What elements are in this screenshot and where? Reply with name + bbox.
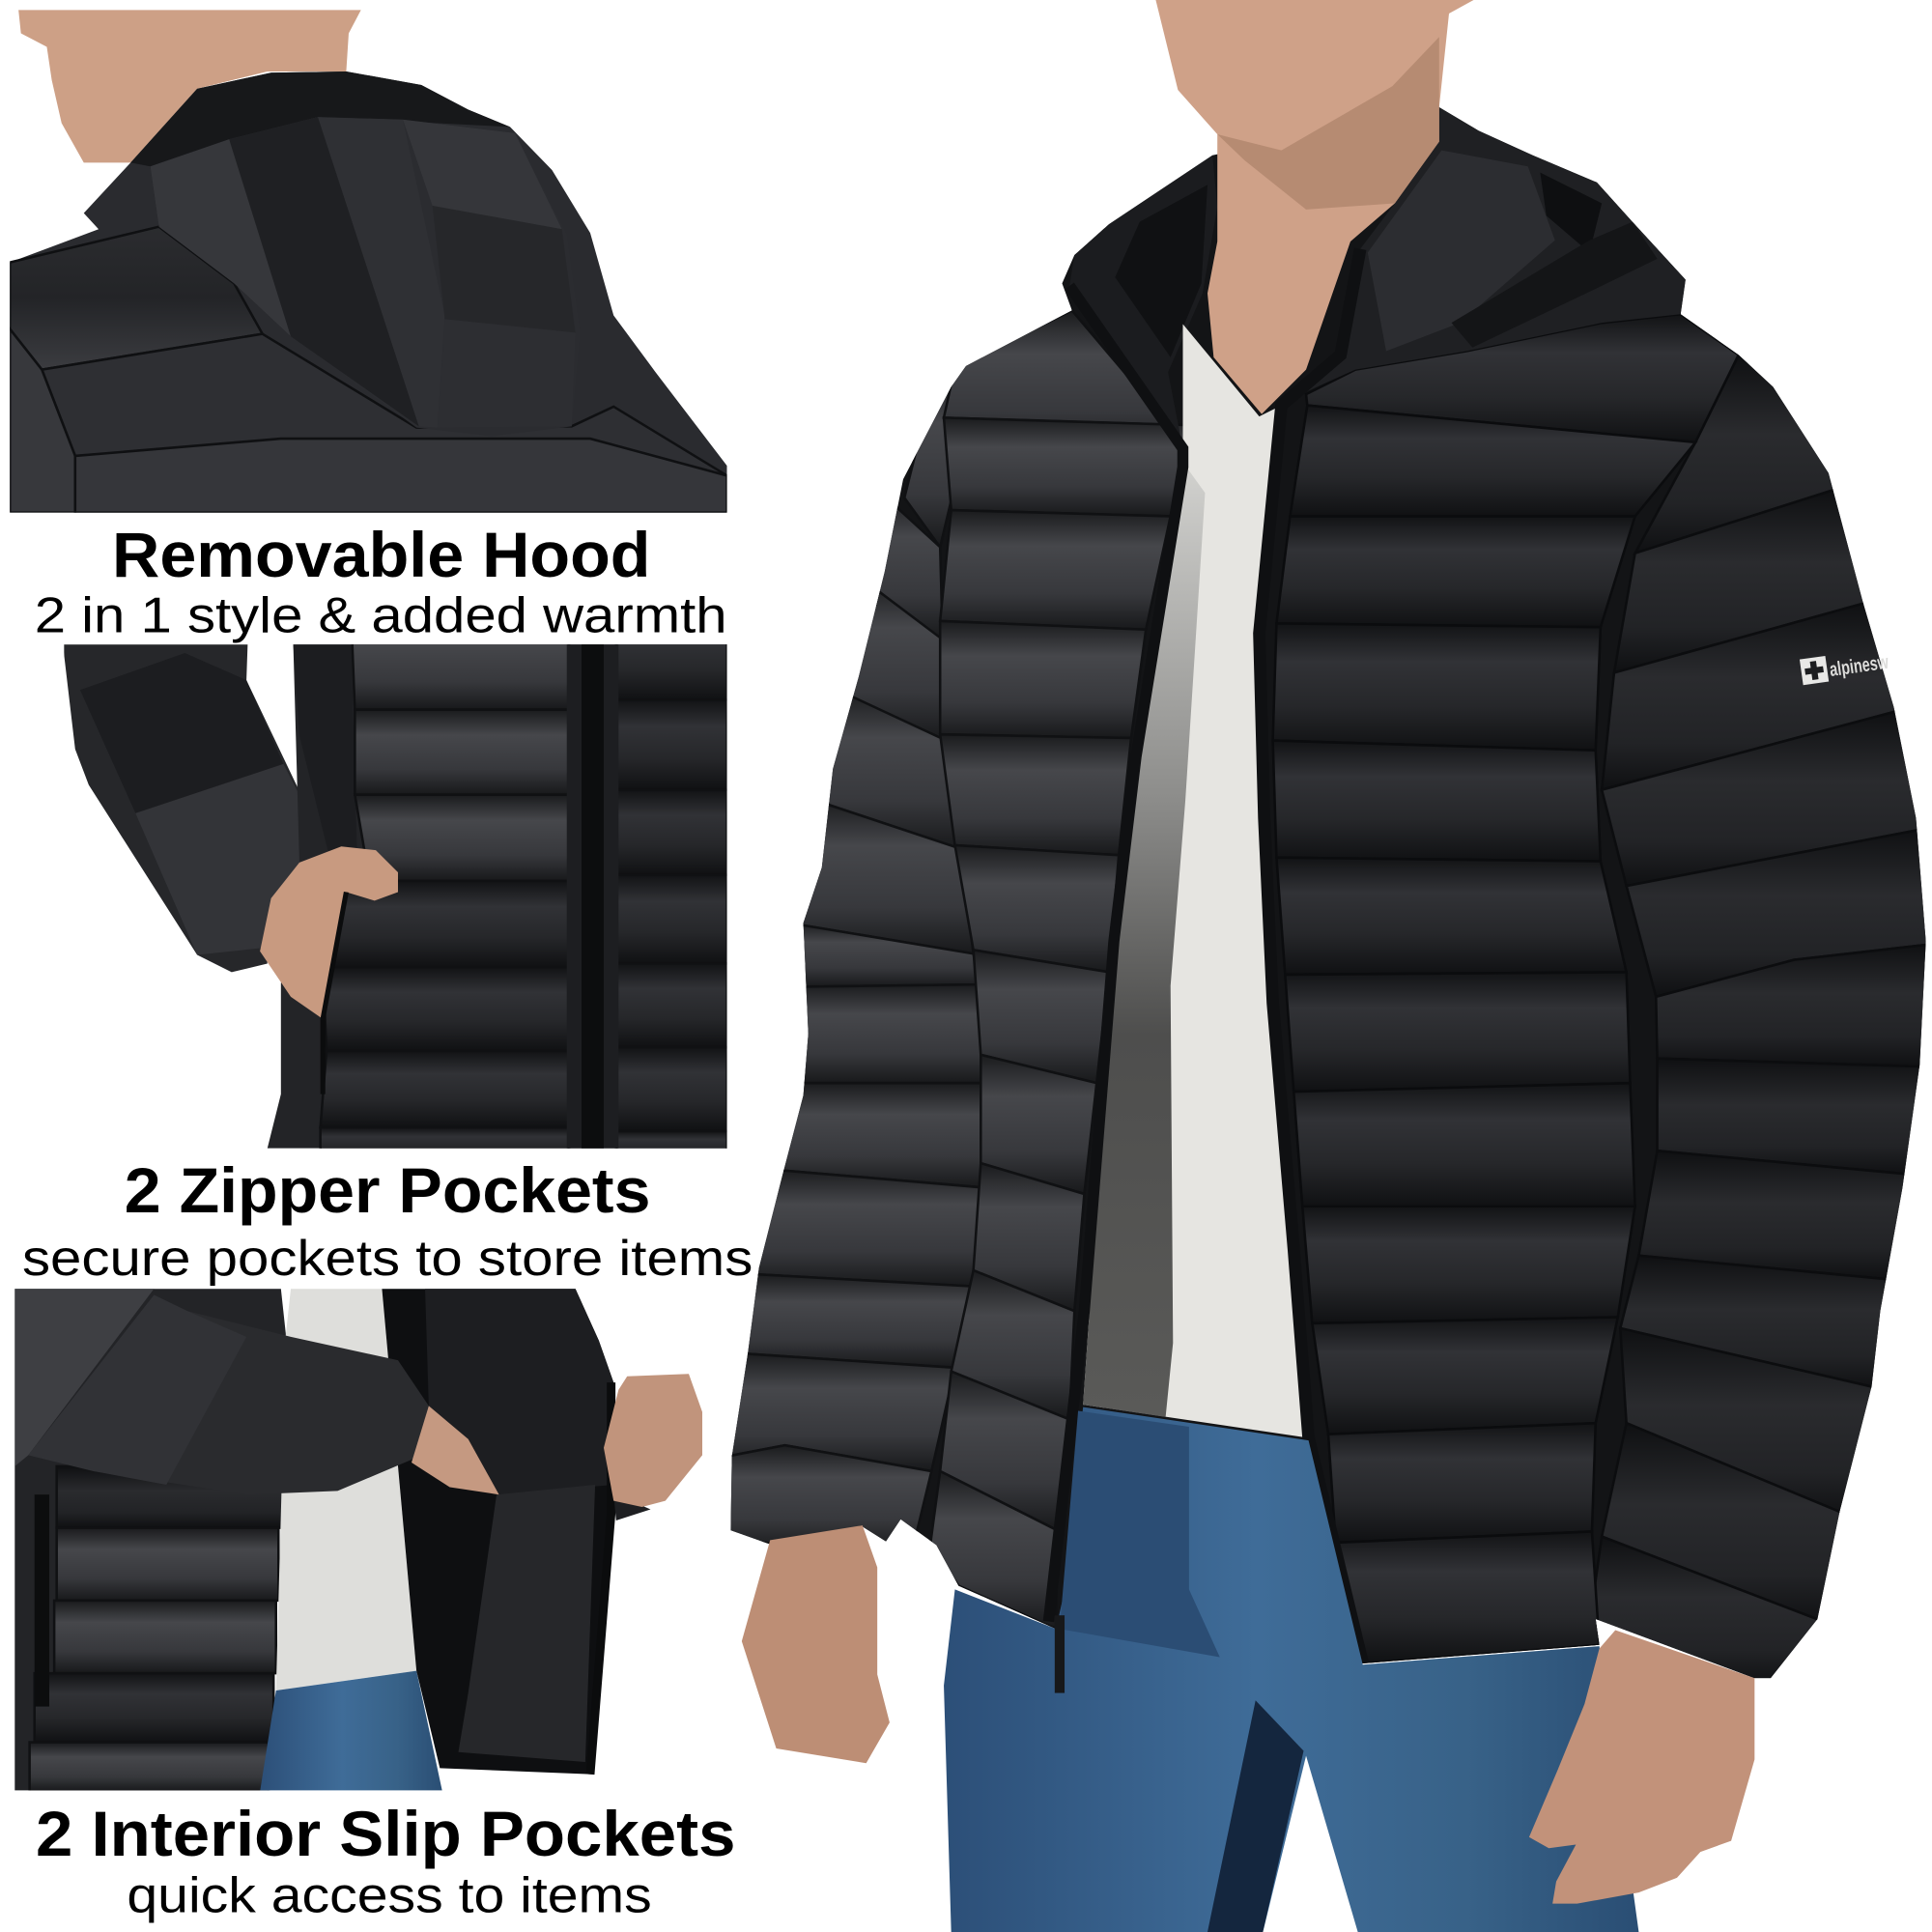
t-shirt xyxy=(276,1289,416,1690)
jacket front xyxy=(268,644,727,1149)
gap between legs xyxy=(1263,1756,1358,1932)
heading: interior slip pockets: 2 Interior Slip Pockets xyxy=(36,1799,735,1870)
heading: removable hood: Removable Hood xyxy=(112,520,650,591)
hood interior shadow xyxy=(1540,173,1602,252)
pocket lining xyxy=(458,1485,595,1762)
upper highlight xyxy=(14,1289,154,1466)
front quilting xyxy=(321,616,727,1158)
subheading: 2 in 1 style & added warmth xyxy=(35,587,727,643)
hood inner panel xyxy=(1368,151,1555,352)
neck and chin xyxy=(1155,0,1474,414)
jacket back xyxy=(10,71,727,513)
chin shadow xyxy=(1217,37,1439,210)
heading: removable hood xyxy=(35,520,727,643)
panel: main jacket photo xyxy=(715,0,1932,1932)
hood xyxy=(1306,107,1686,392)
left zipper xyxy=(1048,286,1182,1622)
right sleeve xyxy=(613,1493,650,1520)
zipper teeth xyxy=(582,644,604,1150)
heading: zipper pockets xyxy=(22,1155,753,1287)
sleeve shading xyxy=(80,653,283,813)
left jacket front xyxy=(14,1289,286,1792)
jeans xyxy=(944,1407,1638,1932)
right hand xyxy=(1529,1631,1754,1904)
subheading: secure pockets to store items xyxy=(22,1231,753,1287)
t-shirt xyxy=(1083,324,1309,1438)
hand in pocket xyxy=(412,1406,499,1494)
panel: zipper pockets photo xyxy=(63,616,727,1158)
inner zipper edge xyxy=(590,1382,611,1775)
heading: zipper pockets: 2 Zipper Pockets xyxy=(125,1155,650,1227)
sleeve highlight xyxy=(135,764,299,954)
center zipper xyxy=(567,644,618,1150)
front quilting xyxy=(30,1466,286,1792)
arm sleeve xyxy=(28,1295,429,1494)
neck xyxy=(18,10,361,162)
fist xyxy=(604,1374,702,1507)
heading: interior slip pockets xyxy=(36,1799,735,1924)
left front quilting xyxy=(930,310,1195,1629)
bottom band xyxy=(75,439,727,513)
sleeve logo: alpinesw xyxy=(1829,652,1889,681)
sleeve fold xyxy=(10,329,75,513)
jeans xyxy=(260,1671,442,1792)
lower back xyxy=(42,334,727,513)
side strip xyxy=(294,644,352,650)
jeans inseam shadow xyxy=(1208,1700,1303,1932)
viewer-right sleeve quilting xyxy=(1589,355,1932,1688)
subheading: quick access to items xyxy=(127,1868,652,1924)
upper back xyxy=(10,227,263,370)
pocket zipper xyxy=(35,1494,49,1707)
left collar lining xyxy=(1115,185,1208,357)
hood drawstring band xyxy=(1452,222,1658,348)
t-shirt shadow xyxy=(1083,462,1205,1417)
jacket body xyxy=(715,99,1932,1700)
panel: removable hood photo xyxy=(10,10,727,513)
panel: interior slip pockets photo xyxy=(14,1289,702,1792)
left hand xyxy=(742,1525,890,1763)
interior upper quilting xyxy=(425,1289,613,1494)
sleeve logo xyxy=(1800,647,1889,685)
right zipper xyxy=(1260,249,1363,1663)
right front quilting xyxy=(1273,314,1739,1663)
back bands xyxy=(10,227,727,513)
hand in pocket xyxy=(260,846,398,1019)
sleeve folds xyxy=(28,1295,246,1485)
viewer-left sleeve quilting xyxy=(727,370,985,1552)
jacket interior xyxy=(382,1289,613,1775)
zipper pull xyxy=(1055,1615,1065,1693)
pocket zipper xyxy=(323,892,346,1094)
sleeve xyxy=(64,644,298,972)
left collar xyxy=(1069,156,1217,448)
collar xyxy=(130,71,510,166)
hood quilting xyxy=(151,118,572,429)
jeans shaded area xyxy=(1060,1410,1220,1658)
